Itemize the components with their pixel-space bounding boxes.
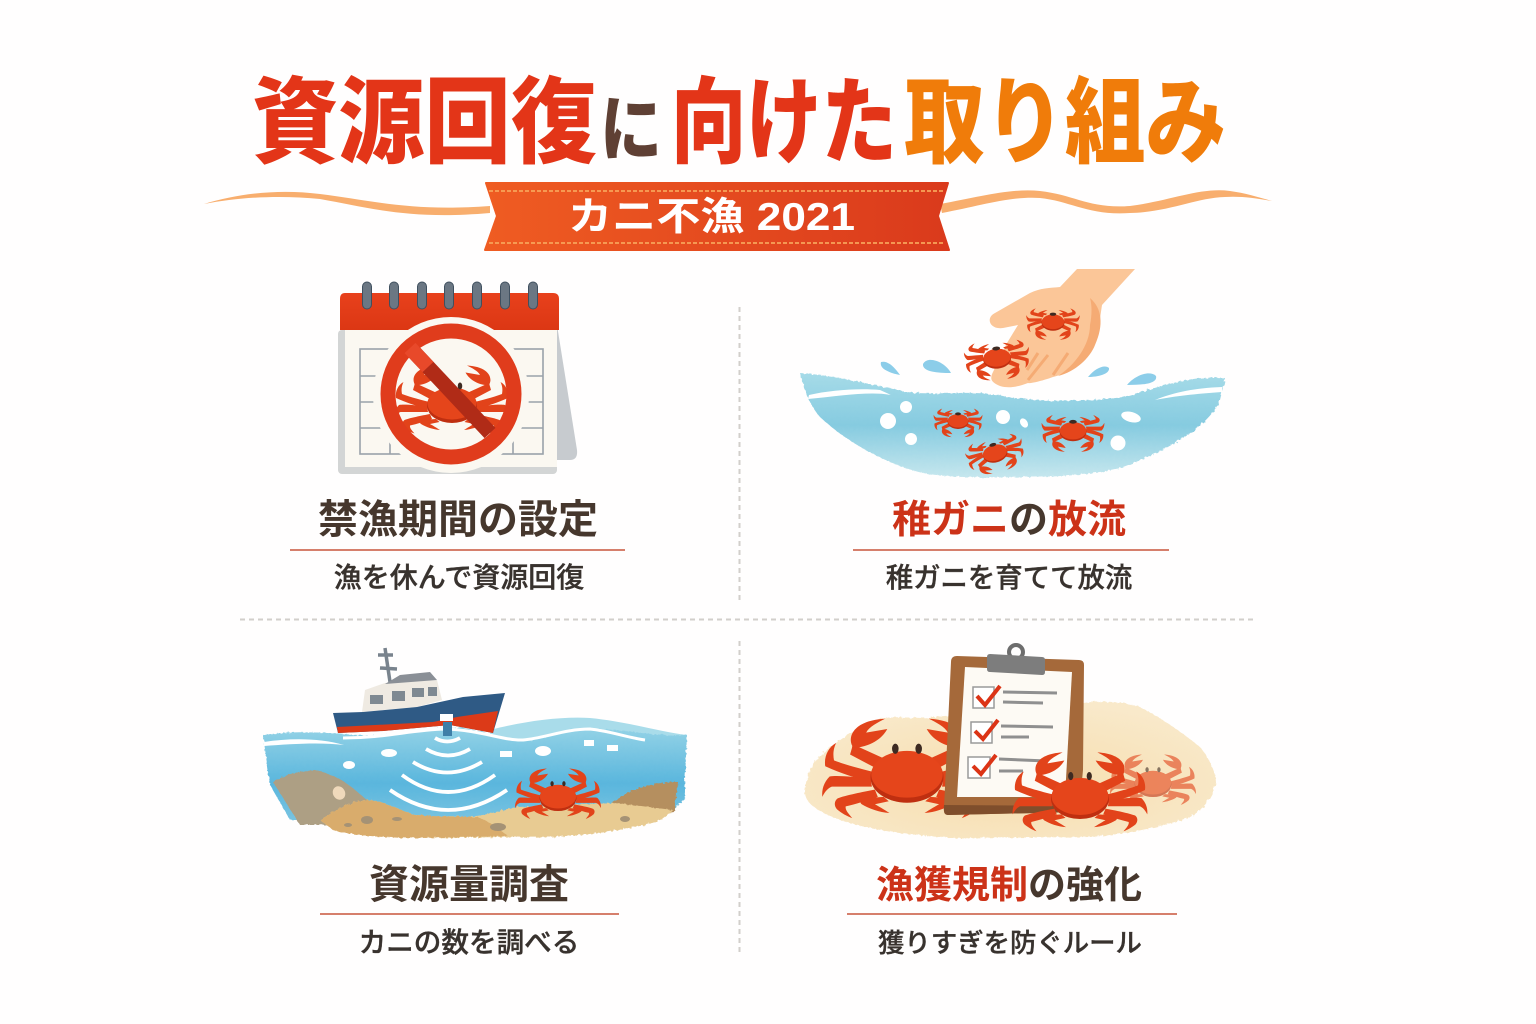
water <box>263 728 687 820</box>
crab on palm <box>1026 308 1080 340</box>
sonar waves <box>390 738 507 810</box>
title: 取り組み <box>904 70 1226 175</box>
title: 資源回復 <box>252 70 597 175</box>
description: 獲りすぎを防ぐルール <box>878 928 1142 958</box>
ship <box>333 648 505 736</box>
icon: hand releasing crabs into water <box>800 269 1225 479</box>
faded crab <box>1110 755 1196 805</box>
crab falling from fingers <box>963 339 1031 382</box>
seabed <box>273 771 367 825</box>
description: カニの数を調べる <box>359 927 579 958</box>
crab on seabed <box>515 769 601 819</box>
heading: 禁漁期間の設定 <box>318 498 598 542</box>
underline <box>847 913 1177 915</box>
front crab <box>1013 752 1147 831</box>
underline <box>320 913 619 915</box>
banner <box>485 183 949 250</box>
large crab <box>822 719 992 818</box>
title: に <box>600 91 662 171</box>
water droplets <box>881 360 1156 385</box>
hand <box>990 269 1135 387</box>
panel: juvenile crab release <box>800 269 1225 593</box>
panel: fishing ban period <box>290 282 625 593</box>
banner label: カニ不漁 2021 <box>568 196 855 239</box>
description: 稚ガニを育てて放流 <box>886 562 1132 593</box>
heading: 資源量調査 <box>369 863 569 907</box>
back wave <box>490 718 687 745</box>
underline <box>853 549 1169 551</box>
description: 漁を休んで資源回復 <box>334 562 584 593</box>
decorative wave: left <box>204 192 490 215</box>
water <box>800 373 1225 478</box>
fish school <box>343 740 618 769</box>
heading: 稚ガニの放流 <box>892 499 1126 542</box>
panel: stock survey <box>263 648 687 958</box>
clipboard <box>944 645 1084 815</box>
heading: 漁獲規制の強化 <box>876 865 1142 907</box>
icon: calendar with crab ban <box>338 282 577 474</box>
underline <box>290 549 625 551</box>
decorative wave: right <box>940 190 1272 213</box>
sand <box>805 702 1216 838</box>
title <box>252 70 1226 175</box>
crabs in water <box>934 409 982 437</box>
icon: clipboard checklist and crabs <box>805 645 1216 838</box>
panel: stronger catch regulations <box>805 645 1216 958</box>
icon: survey ship with sonar <box>263 648 687 838</box>
title: 向けた <box>671 70 897 175</box>
